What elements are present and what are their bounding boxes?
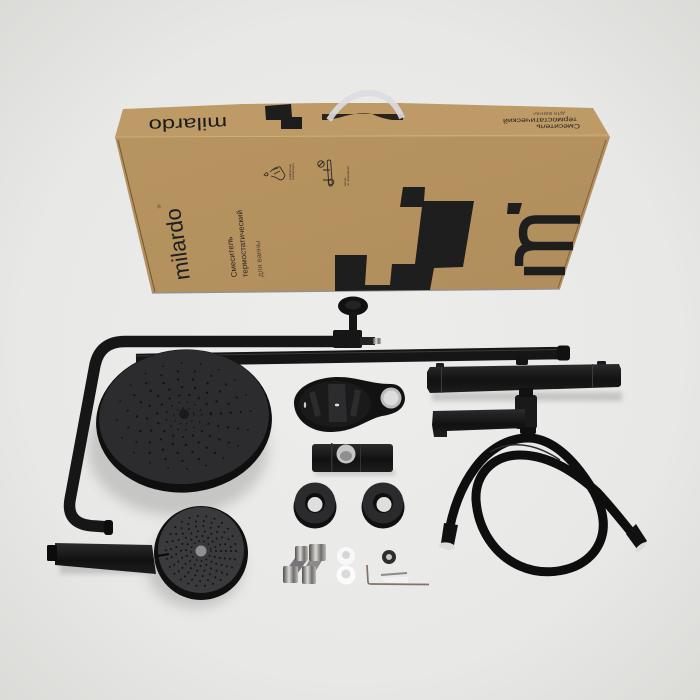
nozzle xyxy=(47,545,57,561)
wall flange left xyxy=(294,482,336,528)
large black geometric shape xyxy=(335,187,474,291)
flap product text: для ванны xyxy=(533,110,565,116)
spout arm xyxy=(432,409,525,437)
dot of logo xyxy=(507,203,522,214)
rain shower head xyxy=(91,344,277,498)
product name: Смеситель xyxy=(225,236,239,278)
box top flap xyxy=(115,103,610,137)
box front face xyxy=(115,137,610,293)
upper bent pipe xyxy=(70,342,345,527)
flexible hose xyxy=(439,438,648,572)
shadows under fittings xyxy=(60,380,622,608)
flap product text: Смеситель xyxy=(536,122,580,131)
lower long rod xyxy=(136,346,570,360)
registered mark: ® xyxy=(155,204,163,209)
side logo: milardo xyxy=(160,207,195,282)
flap black block xyxy=(265,104,302,129)
sliding holder xyxy=(312,443,393,472)
white rubber rings xyxy=(336,547,356,584)
hose left end xyxy=(439,523,458,551)
soap dish xyxy=(294,377,405,432)
care icon: hand: комфортная xyxy=(288,164,292,180)
swivel column xyxy=(515,395,537,429)
pipe end cap xyxy=(104,520,113,535)
top nubs xyxy=(516,355,528,365)
care icon: thermostat: корпус xyxy=(343,177,347,186)
washer xyxy=(382,550,396,564)
chrome brackets xyxy=(283,544,326,584)
product name: термостатический xyxy=(235,210,250,278)
hex key xyxy=(367,565,429,584)
hose right end xyxy=(626,524,648,553)
care icon: thermostat xyxy=(318,160,350,186)
flap product text: термостатический xyxy=(503,116,577,125)
product name: для ванны xyxy=(253,240,265,278)
wall flange right xyxy=(362,482,404,528)
flap logo: milardo xyxy=(148,113,228,135)
screw and anchor xyxy=(381,573,408,583)
thermostat mixer xyxy=(427,355,621,437)
hand shower xyxy=(47,506,248,600)
cardboard box xyxy=(115,93,610,293)
care icon: hand xyxy=(264,163,295,180)
large rotated m glyph xyxy=(519,220,580,271)
translucent carry handle xyxy=(329,93,402,120)
care icon: thermostat: не нагревается xyxy=(346,166,350,186)
handle xyxy=(55,543,156,574)
product name xyxy=(225,210,265,278)
flap product text xyxy=(503,110,580,131)
wall bracket connector xyxy=(333,296,381,348)
care icon: hand: температура xyxy=(291,163,295,180)
carry handle slot xyxy=(322,113,403,120)
mixer body xyxy=(427,364,621,393)
